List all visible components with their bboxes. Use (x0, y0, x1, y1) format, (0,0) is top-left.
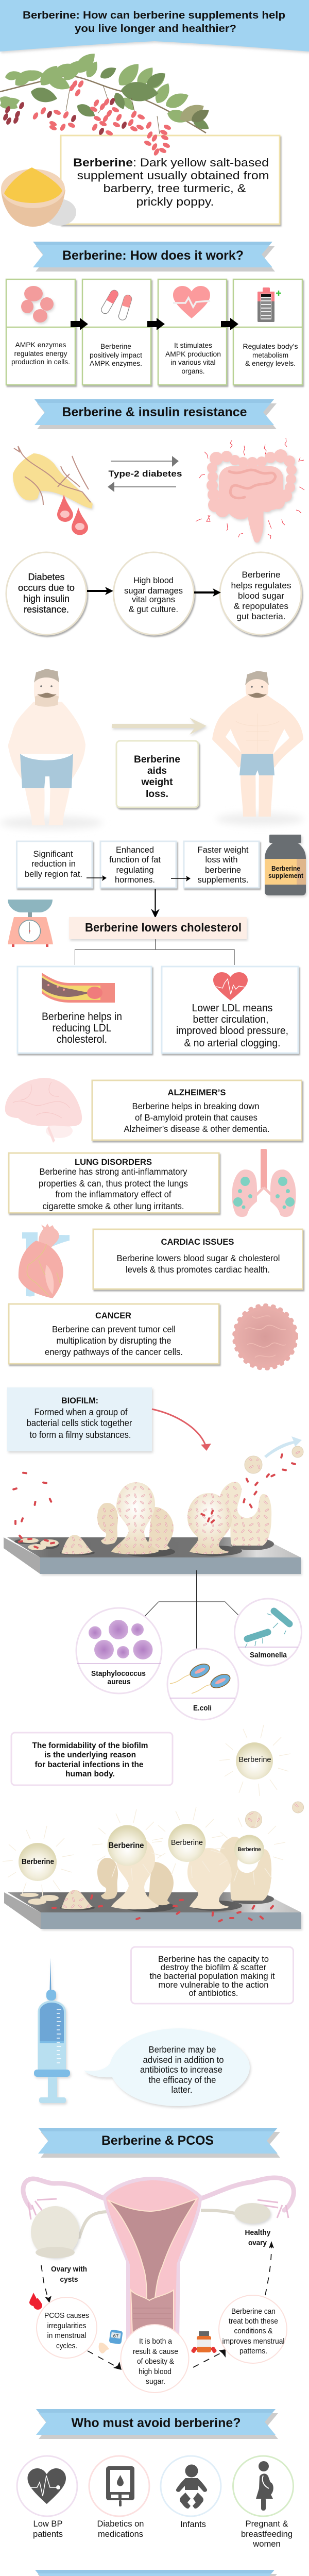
panel: cancer: CANCER (95, 1311, 131, 1320)
speech bubble: antibiotics: the efficacy of the (148, 2075, 216, 2085)
label: healthy ovary (245, 2229, 271, 2247)
panel: lung disorders: properties & can, thus protect the lungs (39, 1178, 188, 1189)
avoid: diabetics on medications (89, 2456, 149, 2539)
section banner: side effects (35, 2570, 277, 2576)
biofilm formidability box (11, 1733, 173, 1785)
berberine ball 3 (152, 1807, 223, 1878)
circle: PCOS irregularities: irregularities (47, 2321, 87, 2330)
biofilm life-cycle illustration (4, 1436, 303, 1574)
panel: lower LDL benefits: & no arterial clogging. (184, 1038, 280, 1049)
step 1: AMPK enzymes (6, 279, 75, 385)
panel: cardiac issues: levels & thus promotes cardiac health. (126, 1264, 270, 1275)
icon: syringe (34, 1958, 70, 2103)
speech bubble: antibiotics: latter. (171, 2084, 193, 2095)
circle: E.coli: E.coli (193, 1704, 212, 1713)
avoid: infants: Infants (180, 2519, 206, 2529)
icon: capsules (100, 289, 132, 321)
weight loss row arrows (87, 875, 191, 918)
step 4: metabolism: metabolism (252, 351, 288, 359)
supplement bottle (265, 835, 306, 895)
berberine ball 4: Berberine (238, 1846, 261, 1853)
flow circle: high blood sugar: sugar damages (124, 586, 183, 596)
type-2 diabetes arrows: Type-2 diabetes (108, 469, 182, 479)
berberine ball 4 (214, 1814, 285, 1885)
flow circle: diabetes: resistance. (24, 604, 69, 615)
speech bubble: antibiotics: Berberine may be (148, 2044, 216, 2055)
circle: PCOS irregularities: in menstrual (47, 2331, 87, 2340)
biofilm definition plate: bacterial cells stick together (27, 1418, 132, 1428)
biofilm formidability box: human body. (65, 1770, 115, 1778)
biofilm formidability box: for bacterial infections in the (35, 1760, 144, 1769)
icon: heart monitor (28, 2468, 66, 2504)
definition box: prickly poppy. (136, 195, 214, 208)
box: fat regulating hormones: function of fat (109, 855, 161, 865)
label: ovary with cysts: Ovary with (51, 2265, 87, 2274)
box: fat regulating hormones: Enhanced (116, 845, 154, 855)
avoid: low BP patients (17, 2456, 77, 2539)
step 1: AMPK enzymes: production in cells. (11, 358, 70, 366)
panel: Alzheimer's (92, 1080, 302, 1140)
header banner (0, 0, 309, 52)
panel: LDL reduction: cholesterol. (57, 1033, 107, 1045)
speech bubble: antibiotics: antibiotics to increase (140, 2064, 222, 2075)
ovary with cysts (31, 2206, 79, 2258)
box: faster weight loss: supplements. (198, 875, 248, 885)
uterus body (102, 2177, 202, 2342)
biofilm formidability box: is the underlying reason (44, 1751, 136, 1759)
scattered bacteria (52, 1894, 274, 1923)
title: you live longer and healthier? (75, 23, 236, 35)
step 4: metabolism: & energy levels. (245, 360, 296, 367)
box: belly fat (16, 841, 92, 888)
definition box: Berberine : Dark yellow salt-based (73, 156, 269, 169)
icon: heart with pulse (213, 972, 248, 1001)
flow circle: diabetes: Diabetes (28, 572, 65, 582)
circle: PCOS irregularities (37, 2297, 97, 2358)
uterus illustration (23, 2177, 294, 2342)
title (23, 10, 285, 35)
speech bubble: antibiotics (84, 2028, 250, 2106)
icon: battery (258, 287, 281, 322)
overweight man (0, 669, 103, 829)
arrows between steps (71, 318, 238, 330)
definition box: barberry, tree turmeric, & (103, 182, 246, 195)
barberry branch illustration (0, 49, 212, 157)
box: capacity to destroy biofilm: destroy the biofilm & scatter (161, 1963, 267, 1972)
icon: pregnant woman (256, 2461, 273, 2511)
flow circle: berberine helps: helps regulates (231, 581, 291, 590)
step 2: berberine impact: Berberine (100, 343, 131, 350)
berberine ball 3: Berberine (171, 1838, 203, 1847)
box: fat regulating hormones: hormones. (115, 875, 155, 885)
flow arrows (87, 587, 221, 597)
step 2: berberine impact: positively impact (90, 351, 142, 359)
flow circle: diabetes: occurs due to (18, 583, 75, 593)
step 1: AMPK enzymes: AMPK enzymes (15, 341, 66, 349)
icon: clogged artery (42, 973, 115, 1003)
panel: lower LDL benefits: Lower LDL means (192, 1003, 273, 1014)
cholesterol connector (75, 939, 234, 965)
icon: baby (176, 2465, 207, 2509)
icon: heartbeat heart (173, 286, 210, 318)
circle: result and cause (121, 2325, 188, 2393)
flow circle: high blood sugar: High blood (133, 576, 174, 585)
icon: glucometer and pancreas (99, 2329, 123, 2353)
circle: PCOS irregularities: cycles. (56, 2342, 77, 2350)
flow circle: high blood sugar (113, 552, 194, 635)
avoid: pregnant and breastfeeding: breastfeeding (241, 2529, 293, 2539)
circle: berberine treats: improves menstrual (222, 2337, 284, 2346)
biofilm definition plate: to form a filmy substances. (30, 1430, 131, 1440)
label: healthy ovary: ovary (248, 2239, 267, 2247)
biofilm definition plate: BIOFILM: (61, 1396, 98, 1405)
circle: Staphylococcus aureus: aureus (107, 1677, 131, 1686)
pancreas with blood drops (13, 446, 93, 535)
biofilm definition plate: Formed when a group of (34, 1407, 128, 1417)
flow circle: high blood sugar: vital organs (132, 595, 175, 604)
weight loss box: loss. (146, 789, 168, 800)
circle: berberine treats: conditions & (234, 2327, 273, 2335)
flow circle: diabetes: high insulin (23, 594, 70, 604)
panel: cancer: Berberine can prevent tumor cell (52, 1324, 176, 1334)
circle: Salmonella: Salmonella (250, 1651, 287, 1659)
title: Berberine: How can berberine supplements help (23, 10, 285, 21)
cholesterol heading plate: Berberine lowers cholesterol (85, 921, 242, 934)
panel: lung disorders: LUNG DISORDERS (75, 1157, 152, 1167)
step 1: AMPK enzymes: regulates energy (14, 350, 67, 358)
definition box: supplement usually obtained from (77, 169, 269, 182)
connector to bacteria (145, 1570, 238, 1650)
berberine ball 2: Berberine (108, 1841, 144, 1850)
section banner: how does it work (33, 242, 275, 272)
section banner: PCOS: Berberine & PCOS (101, 2133, 214, 2148)
step 3: AMPK production: organs. (181, 367, 205, 375)
icon: glucometer and pancreas: 67 (113, 2334, 118, 2339)
berberine ball (219, 1725, 290, 1796)
powder bowl (1, 167, 76, 227)
box: faster weight loss: loss with (205, 855, 238, 865)
berberine ball 1 (3, 1826, 74, 1897)
panel: Alzheimer's: ALZHEIMER’S (168, 1088, 226, 1097)
avoid: pregnant and breastfeeding: Pregnant & (245, 2519, 288, 2529)
panel: Alzheimer's: Alzheimer’s disease & other dementia. (124, 1124, 270, 1134)
icon: brain (5, 1078, 82, 1143)
panel: lung disorders: Berberine has strong anti-inflammatory (39, 1166, 187, 1177)
avoid: diabetics on medications: medications (98, 2529, 143, 2539)
dashed flow arrows (41, 2246, 271, 2368)
circle: result and cause: It is both a (139, 2337, 173, 2346)
weight loss box: Berberine (134, 754, 180, 765)
panel: Alzheimer's: of B-amyloid protein that causes (135, 1112, 258, 1123)
box: faster weight loss: Faster weight (198, 845, 249, 855)
section banner: who must avoid (36, 2409, 278, 2439)
circle: result and cause: result & cause (133, 2347, 178, 2356)
red curved arrow (152, 1409, 211, 1451)
bottle label (268, 865, 304, 879)
label: healthy ovary: Healthy (245, 2229, 271, 2237)
avoid: diabetics on medications: Diabetics on (97, 2519, 144, 2529)
circle: Staphylococcus aureus (76, 1608, 162, 1693)
weight loss box: weight (141, 777, 173, 788)
fallopian tubes (23, 2178, 294, 2210)
box: fat regulating hormones: regulating (116, 866, 153, 875)
panel: cardiac issues: CARDIAC ISSUES (161, 1237, 234, 1247)
step 4: metabolism (233, 279, 302, 385)
flow circle: high blood sugar: & gut culture. (129, 605, 178, 614)
panel: LDL reduction: reducing LDL (53, 1022, 111, 1034)
step 4: metabolism: Regulates body’s (243, 343, 298, 350)
circle: berberine treats: patterns. (239, 2347, 267, 2355)
flow circle: berberine helps: Berberine (242, 570, 280, 580)
flow circle: berberine helps: blood sugar (238, 591, 285, 601)
icon: glucose meter (106, 2466, 134, 2506)
panel: lung disorders: cigarette smoke & other lung irritants. (42, 1201, 184, 1211)
icon: weighing scale (8, 900, 53, 947)
circle: berberine treats (219, 2295, 287, 2363)
panel: cancer: energy pathways of the cancer cells. (45, 1347, 183, 1357)
fit man (212, 671, 304, 825)
section banner: who must avoid: Who must avoid berberine? (71, 2416, 241, 2430)
circle: result and cause: high blood (139, 2367, 171, 2376)
circle: E.coli (167, 1649, 238, 1720)
definition box (61, 135, 280, 224)
panel: Alzheimer's: Berberine helps in breaking down (132, 1101, 260, 1111)
arrowheads (45, 2241, 274, 2370)
circle: Salmonella (235, 1599, 302, 1666)
panel: cardiac issues: Berberine lowers blood sugar & cholesterol (116, 1253, 280, 1263)
panel: lower LDL benefits: better circulation, (193, 1014, 269, 1025)
section banner: how does it work: Berberine: How does it work? (62, 248, 244, 263)
box: faster weight loss (184, 841, 259, 888)
panel: lung disorders (9, 1153, 219, 1213)
step 3: AMPK production: It stimulates (174, 342, 212, 349)
flow circle: berberine helps: & repopulates (234, 602, 288, 611)
biofilm formidability box: The formidability of the biofilm (32, 1741, 148, 1750)
icon: lungs (232, 1149, 296, 1217)
box: belly fat: reduction in (31, 859, 76, 869)
section banner: insulin resistance (35, 399, 277, 429)
cholesterol heading plate (69, 917, 247, 939)
step 2: berberine impact (82, 279, 151, 385)
avoid: low BP patients: patients (33, 2529, 63, 2539)
box: capacity to destroy biofilm: of antibiotics. (188, 1989, 238, 1998)
panel: LDL reduction (18, 967, 151, 1053)
flow circle: diabetes (6, 552, 87, 635)
panel: cancer: multiplication by disrupting the (57, 1335, 171, 1346)
berberine ball 2 (92, 1809, 163, 1880)
circle: berberine treats: Berberine can (231, 2307, 276, 2316)
box: capacity to destroy biofilm: the bacterial population making it (149, 1972, 275, 1981)
avoid: pregnant and breastfeeding (233, 2456, 294, 2549)
circle: berberine treats: treat both these (229, 2317, 278, 2326)
transformation arrow (112, 718, 207, 735)
box: faster weight loss: berberine (205, 866, 241, 875)
label: ovary with cysts (51, 2265, 87, 2284)
bottle label: Berberine (271, 865, 300, 872)
type-2 diabetes arrows (108, 456, 182, 492)
panel: lower LDL benefits: improved blood pressure, (176, 1025, 288, 1037)
panel: lower LDL benefits (162, 967, 298, 1053)
step 2: berberine impact: AMPK enzymes. (90, 360, 142, 367)
box: belly fat: Significant (33, 850, 73, 859)
berberine ball: Berberine (239, 1755, 271, 1764)
box: belly fat: belly region fat. (25, 870, 82, 879)
icon: medicine bottle (191, 2331, 217, 2353)
label: ovary with cysts: cysts (60, 2276, 78, 2284)
bottle label: supplement (268, 872, 304, 879)
panel: cancer (9, 1304, 219, 1364)
biofilm definition plate (7, 1387, 152, 1451)
healthy ovary (234, 2203, 270, 2224)
step 3: AMPK production: in various vital (171, 359, 215, 366)
circle: Staphylococcus aureus: Staphylococcus (91, 1669, 146, 1678)
weight loss box (116, 741, 198, 807)
icon: blood cells (21, 286, 54, 323)
avoid: infants (161, 2456, 221, 2529)
avoid: pregnant and breastfeeding: women (252, 2539, 281, 2549)
box: capacity to destroy biofilm (131, 1947, 294, 2004)
circle: result and cause: of obesity & (137, 2357, 174, 2366)
panel: lung disorders: from the inflammatory effect of (56, 1189, 171, 1199)
speech bubble: antibiotics: advised in addition to (143, 2055, 224, 2065)
icon: anatomical heart (19, 1224, 70, 1298)
flow circle: berberine helps (220, 552, 301, 635)
flow circle: berberine helps: gut bacteria. (237, 612, 285, 621)
section banner: PCOS (38, 2128, 280, 2158)
box: fat regulating hormones (100, 841, 176, 888)
intestines with bacteria (196, 438, 304, 543)
biofilm attacked by berberine illustration (3, 1802, 304, 1929)
bacteria squiggles (196, 438, 304, 539)
section banner: insulin resistance: Berberine & insulin resistance (62, 405, 247, 419)
icon: blood drops (29, 2293, 42, 2310)
box: capacity to destroy biofilm: Berberine has the capacity to (158, 1955, 269, 1964)
berberine ball 1: Berberine (22, 1857, 54, 1866)
dispersal arrow (264, 1436, 302, 1458)
step 3: AMPK production: AMPK production (165, 350, 221, 358)
circle: result and cause: sugar. (146, 2377, 165, 2386)
weight loss box: aids (147, 766, 167, 776)
box: capacity to destroy biofilm: more vulnerable to the action (159, 1980, 269, 1990)
icon: cancer cell (234, 1306, 296, 1368)
panel: LDL reduction: Berberine helps in (42, 1011, 122, 1023)
avoid: low BP patients: Low BP (33, 2519, 63, 2529)
step 3: AMPK production (158, 279, 227, 385)
ligaments (79, 2210, 237, 2239)
panel: cardiac issues (93, 1229, 303, 1289)
circle: PCOS irregularities: PCOS causes (44, 2311, 89, 2320)
